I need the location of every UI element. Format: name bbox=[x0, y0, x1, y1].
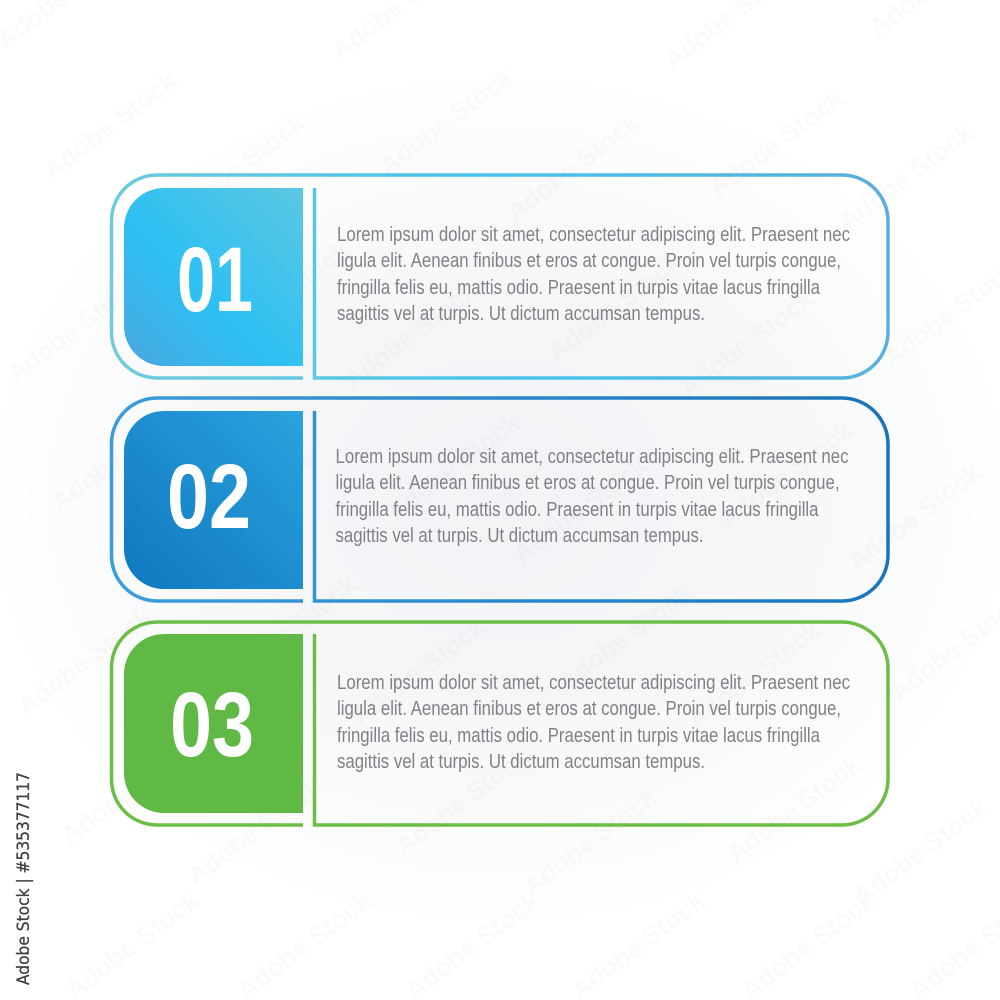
text block 02: sagittis vel at turpis. Ut dictum accumsan tempus. bbox=[336, 525, 704, 547]
panel 03 outline bbox=[112, 622, 888, 825]
panel: step 02 bbox=[112, 398, 888, 601]
text block 03: sagittis vel at turpis. Ut dictum accumsan tempus. bbox=[337, 751, 705, 773]
text block 01 bbox=[337, 224, 850, 325]
number block 02 bbox=[124, 411, 303, 589]
number block 01 bbox=[124, 188, 303, 366]
text block 03: ligula elit. Aenean finibus et eros at congue. Proin vel turpis congue, bbox=[337, 698, 841, 720]
text block 03: fringilla felis eu, mattis odio. Praesent in turpis vitae lacus fringilla bbox=[337, 725, 821, 747]
text block 02: fringilla felis eu, mattis odio. Praesent in turpis vitae lacus fringilla bbox=[336, 499, 819, 521]
text block 02: ligula elit. Aenean finibus et eros at congue. Proin vel turpis congue, bbox=[336, 472, 840, 494]
number 01: 01 bbox=[177, 229, 253, 331]
panel 02 outline bbox=[112, 398, 888, 601]
stock credit text: Adobe Stock | #535377117 bbox=[14, 772, 34, 985]
text block 03: Lorem ipsum dolor sit amet, consectetur adipiscing elit. Praesent nec bbox=[337, 672, 850, 694]
text block 01: ligula elit. Aenean finibus et eros at congue. Proin vel turpis congue, bbox=[337, 250, 841, 272]
panel 01 outline bbox=[112, 175, 888, 378]
text block 01: fringilla felis eu, mattis odio. Praesent in turpis vitae lacus fringilla bbox=[337, 277, 821, 299]
text block 02: Lorem ipsum dolor sit amet, consectetur adipiscing elit. Praesent nec bbox=[336, 446, 848, 468]
text block 01: sagittis vel at turpis. Ut dictum accumsan tempus. bbox=[337, 303, 705, 325]
number block 03 bbox=[124, 634, 303, 813]
panel: step 03 bbox=[112, 622, 888, 825]
number 02: 02 bbox=[167, 446, 251, 548]
number 03: 03 bbox=[170, 674, 254, 776]
text block 01: Lorem ipsum dolor sit amet, consectetur adipiscing elit. Praesent nec bbox=[337, 224, 850, 246]
panel: step 01 bbox=[112, 175, 888, 378]
text block 03 bbox=[337, 672, 850, 773]
text block 02 bbox=[336, 446, 848, 547]
